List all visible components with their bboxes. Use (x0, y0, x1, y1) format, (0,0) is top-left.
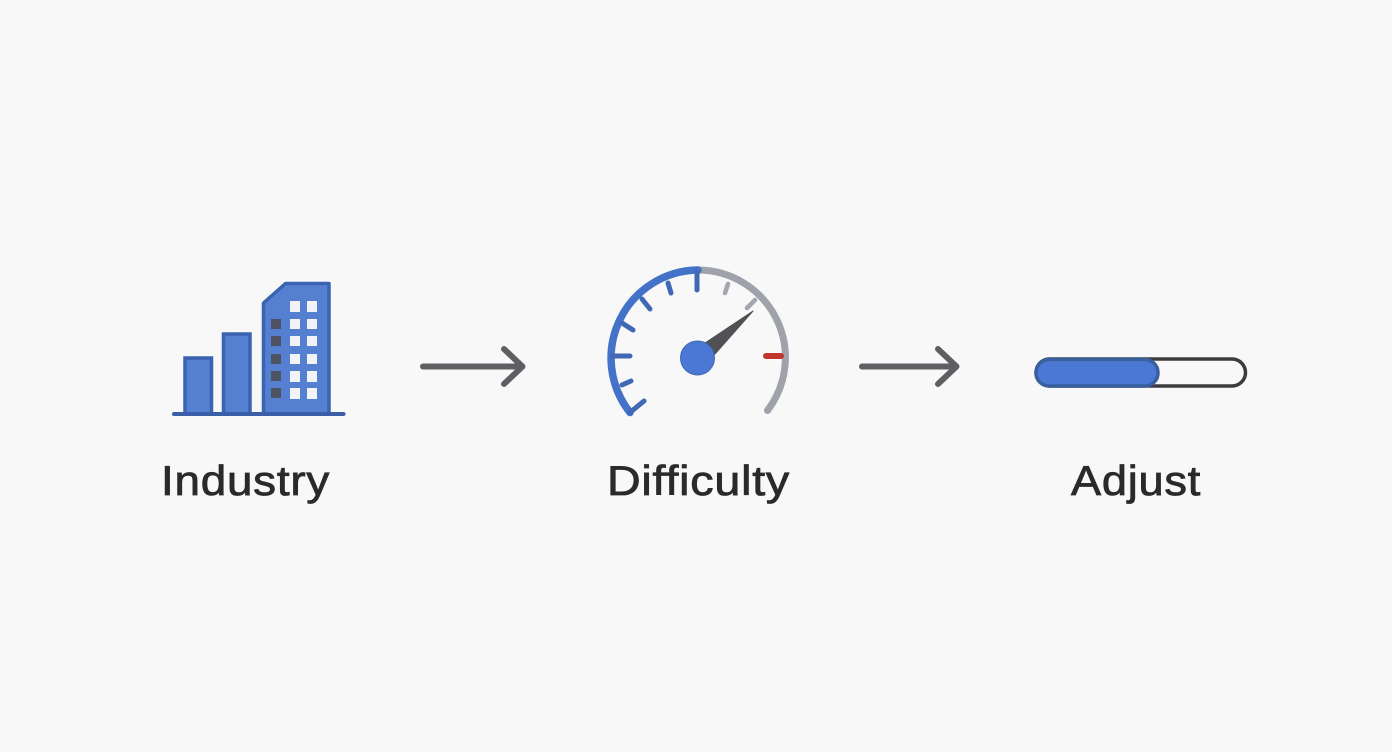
red tick (766, 353, 781, 359)
medium bar (224, 334, 250, 414)
icon: industry buildings (174, 284, 344, 414)
fill (1036, 360, 1158, 386)
white windows (290, 301, 317, 399)
arrow: industry to difficulty (423, 349, 522, 384)
hub (680, 341, 714, 375)
label: Adjust: Adjust (1071, 457, 1201, 504)
arrow: difficulty to adjust (862, 349, 956, 384)
label: Difficulty: Difficulty (607, 457, 790, 504)
icon: difficulty gauge (611, 270, 785, 412)
baseline (174, 412, 344, 416)
gray ticks (725, 284, 755, 308)
icon: adjust slider (1036, 359, 1246, 386)
short bar (185, 358, 212, 414)
track (1036, 359, 1246, 386)
blue arc (611, 270, 698, 412)
tower (264, 284, 329, 414)
blue ticks (612, 272, 697, 412)
label: Industry: Industry (161, 457, 330, 504)
gray arc (698, 270, 785, 410)
dark windows (271, 319, 281, 398)
needle (705, 311, 753, 354)
